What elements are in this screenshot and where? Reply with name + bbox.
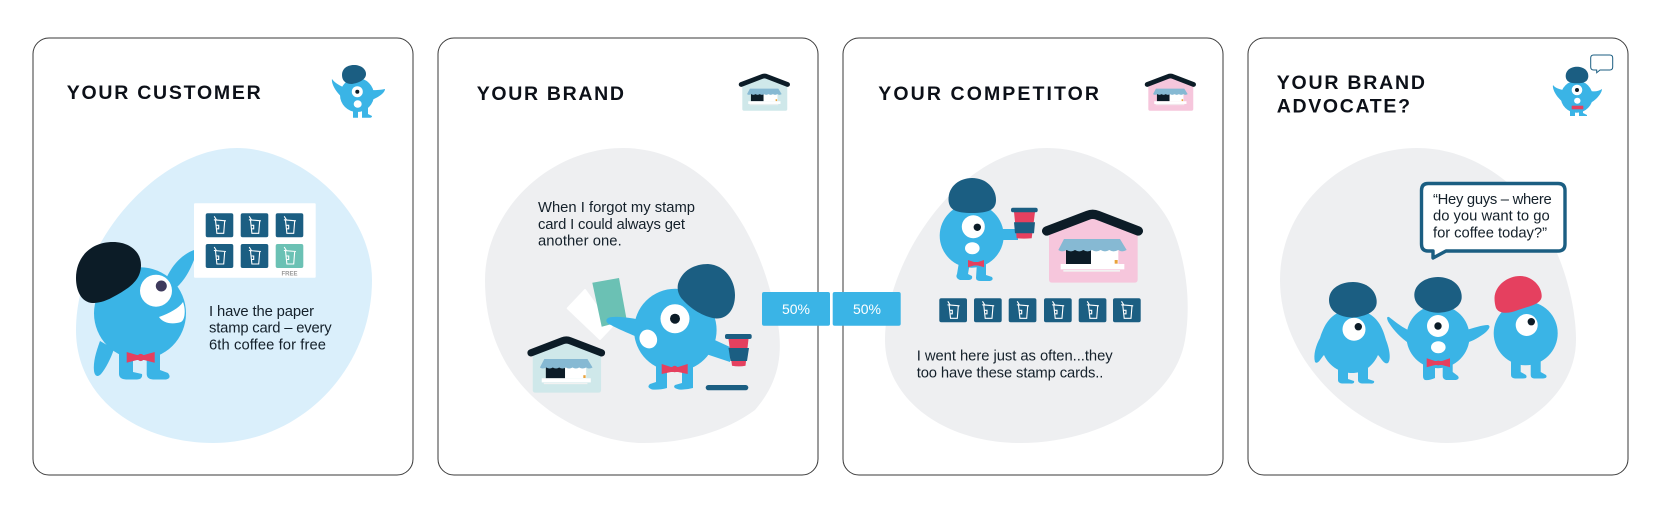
background blob: brand [485,148,780,443]
speech bubble [1422,184,1565,258]
text: competitor quote: too have these stamp cards.. [917,365,1103,381]
background blob: advocate [1280,148,1576,443]
character: left friend [1314,282,1390,384]
background blob: competitor [885,148,1188,443]
stamp card [194,203,316,278]
text: brand quote: another one. [538,234,622,250]
panel: your brand advocate [1248,38,1628,475]
row of stamps [939,298,1141,322]
badge: 50% competitor [833,292,901,326]
character: customer with card and coffee [568,264,752,390]
panel: your brand [438,38,818,475]
badge: 50% competitor: 50% [853,301,881,317]
character: advocate waving [1387,277,1489,380]
text: brand quote: When I forgot my stamp [538,200,695,216]
icon: small competitor shop [1147,75,1194,111]
background blob: customer [76,148,372,443]
stamp card: FREE [281,272,298,278]
character: right friend with red hat [1494,276,1558,378]
text: advocate quote: for coffee today?” [1433,225,1547,241]
character: customer with coffee [940,178,1038,281]
text: customer quote: 6th coffee for free [209,337,326,353]
text: advocate quote: do you want to go [1433,209,1550,225]
text: customer quote: stamp card – every [209,321,332,337]
heading: your customer: YOUR CUSTOMER [67,82,261,104]
icon: small advocate with chat bubble [1553,55,1613,116]
badge: 50% brand: 50% [782,301,810,317]
panel: your customer [33,38,413,475]
character: customer pointing at card [76,242,194,380]
heading: your brand advocate: YOUR BRAND [1277,72,1425,94]
heading: your brand advocate: ADVOCATE? [1277,96,1410,118]
heading: your brand: YOUR BRAND [477,83,624,105]
text: competitor quote: I went here just as often...they [917,349,1113,365]
text: brand quote: card I could always get [538,217,685,233]
text: customer quote: I have the paper [209,304,314,320]
coffee cup [1011,208,1038,239]
panel: your competitor [843,38,1223,475]
brand coffee shop [531,338,602,393]
icon: small customer character [332,65,385,118]
badge: 50% brand [762,292,830,326]
icon: small brand shop [741,75,788,111]
heading: your competitor: YOUR COMPETITOR [878,83,1099,105]
competitor coffee shop [1047,212,1138,283]
coffee cup [725,334,752,366]
text: advocate quote: “Hey guys – where [1433,192,1552,208]
